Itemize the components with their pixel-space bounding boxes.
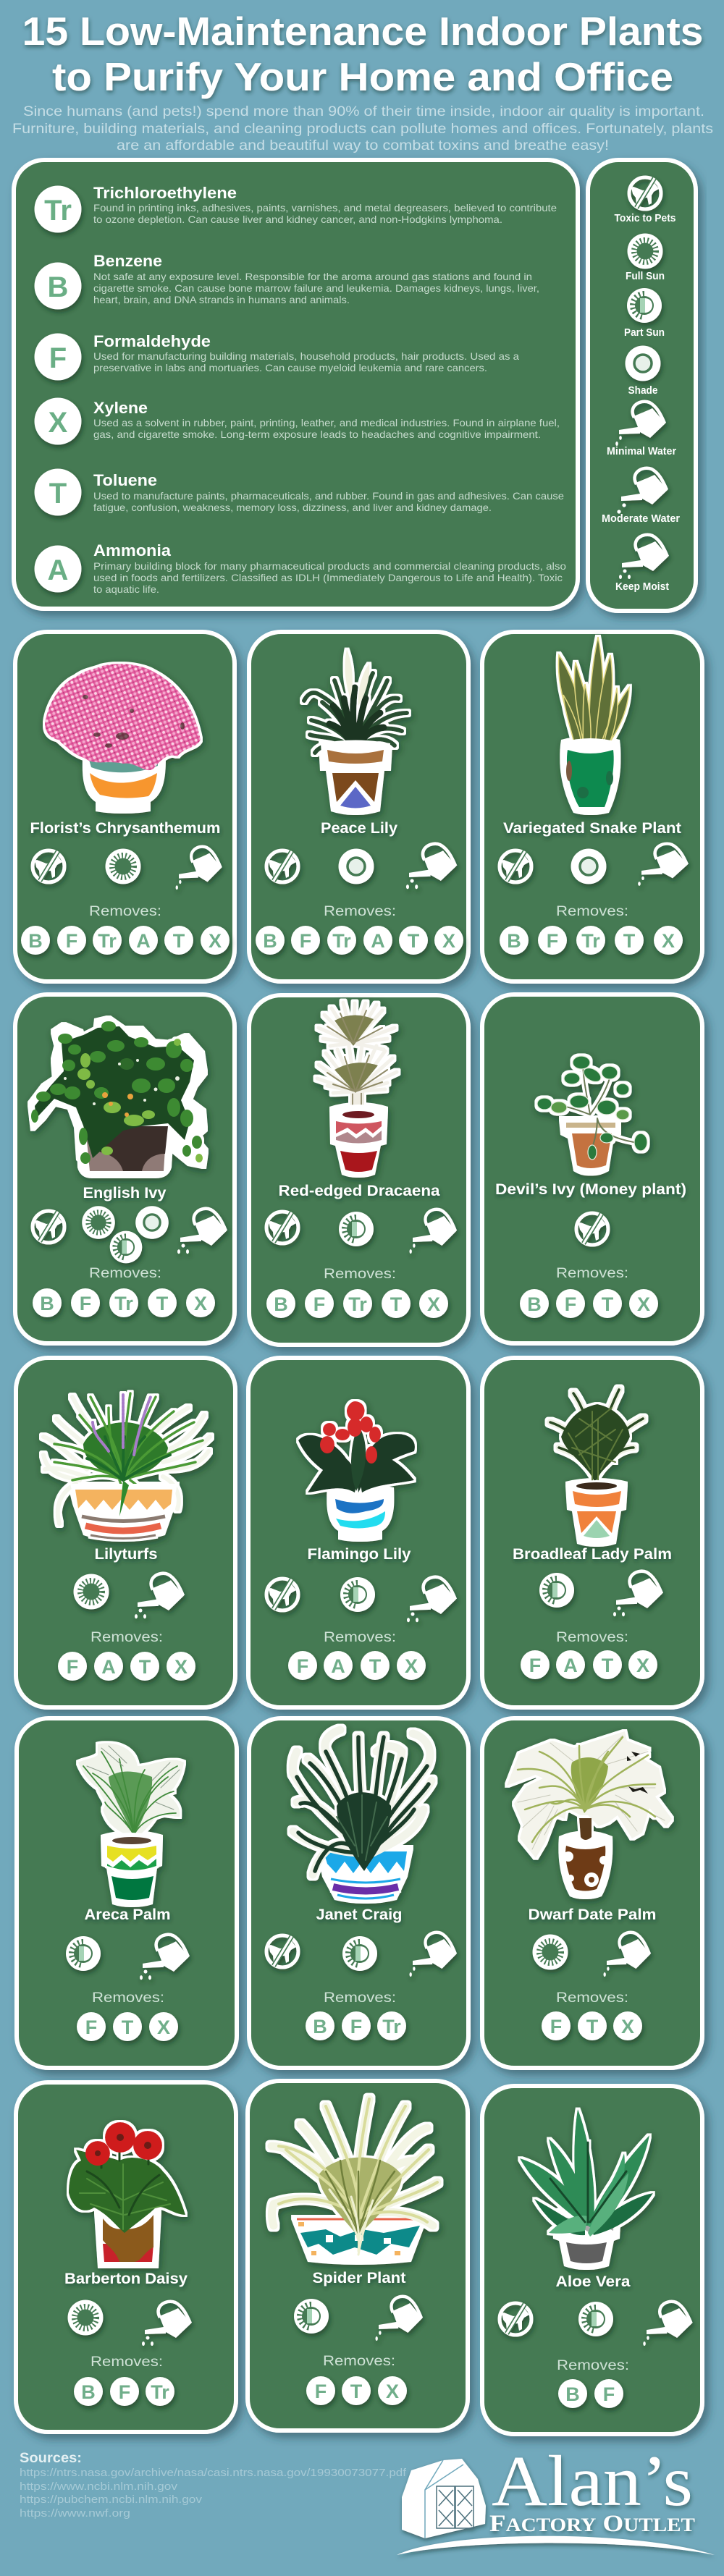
toxin badges: T: [139, 1656, 151, 1678]
toxin badges: Tr: [98, 930, 117, 952]
toxin badges: F: [603, 2383, 615, 2405]
toxin badges: F: [67, 1656, 78, 1678]
removes label: Removes:: [324, 1630, 396, 1645]
title: 15 Low-Maintenance Indoor Plants: [22, 9, 703, 54]
toxin badges: F: [315, 2381, 327, 2402]
plant name: Peace Lily: [321, 820, 397, 837]
toxin badges: F: [300, 930, 311, 952]
toxin badges: X: [194, 1293, 207, 1314]
toxin badges: T: [586, 2016, 599, 2037]
toxin badges: X: [442, 930, 455, 952]
title: [22, 9, 703, 99]
sources: [20, 2451, 407, 2520]
toxin badges: A: [331, 1655, 345, 1677]
chemical: Formaldehyde: Formaldehyde: [93, 332, 211, 350]
panel: Aloe Vera: [482, 2086, 702, 2434]
toxin badges: X: [637, 1293, 650, 1315]
plant: peace lily in brown pot: [304, 649, 407, 813]
removes label: Removes:: [324, 1990, 396, 2006]
toxin badges: X: [636, 1655, 649, 1676]
toxin badges: X: [386, 2381, 399, 2402]
toxin badges: F: [80, 1293, 91, 1314]
toxin badges: T: [602, 1655, 614, 1676]
plant name: Devil’s Ivy (Money plant): [495, 1181, 686, 1198]
care icons: [266, 844, 456, 889]
toxin badges: T: [156, 1293, 169, 1314]
legend: moderate water: [602, 468, 680, 525]
plant: flamingo lily in blue pot: [298, 1401, 415, 1540]
plant name: Spider Plant: [313, 2270, 405, 2286]
care icons: [533, 1933, 650, 1977]
plant: snake plant in green pot: [558, 637, 629, 813]
legend: full sun: [626, 233, 665, 282]
toxin badges: B: [81, 2381, 96, 2403]
toxin badges: [306, 2376, 407, 2405]
toxin badges: B: [263, 930, 277, 952]
plant name: Areca Palm: [84, 1906, 171, 1923]
legend: moderate water: Moderate Water: [602, 513, 680, 525]
plant name: Flamingo Lily: [307, 1546, 411, 1563]
toxin badges: Tr: [348, 1293, 367, 1315]
plant name: Variegated Snake Plant: [503, 820, 681, 837]
removes label: Removes:: [556, 1990, 628, 2006]
chemical: Toluene: Toluene: [93, 471, 157, 489]
toxin badges: B: [313, 2016, 327, 2037]
chemical: Toluene: T: [49, 478, 67, 510]
removes label: Removes:: [323, 2354, 395, 2369]
chemical: Xylene: gas, and cigarette smoke. Long-term exposure leads to headaches and cognitive impairment.: [93, 428, 541, 440]
panel: Lilyturfs: [16, 1358, 235, 1707]
icon: barn: [402, 2459, 486, 2538]
toxin badges: T: [369, 1655, 382, 1677]
care icons: [576, 1213, 608, 1245]
logo: Alan's Factory Outlet: [397, 2441, 715, 2555]
toxin badges: F: [119, 2381, 130, 2403]
toxin badges: [74, 2377, 174, 2406]
removes label: Removes:: [556, 904, 628, 919]
panel: icon legend: [588, 160, 696, 611]
toxin badges: X: [662, 930, 675, 952]
toxin badges: F: [313, 1293, 325, 1315]
chemical: Trichloroethylene: Tr: [44, 195, 72, 227]
legend: minimal water: Minimal Water: [607, 446, 676, 457]
toxin badges: F: [85, 2017, 97, 2038]
chemical: Ammonia: used in foods and fertilizers. Classified as IDLH (Immediately Dangerous to Life and Health). Toxic: [93, 572, 563, 583]
chemical: Xylene: Xylene: [93, 399, 148, 417]
toxin badges: X: [174, 1656, 188, 1678]
chemical: Ammonia: [35, 541, 566, 595]
legend: part sun: [624, 288, 665, 339]
care icons: [500, 844, 688, 886]
toxin badges: Tr: [114, 1293, 133, 1314]
chemical: Xylene: Used as a solvent in rubber, paint, printing, leather, and medical industries. Found in airplane fuel,: [93, 417, 560, 428]
panel: Areca Palm: [17, 1718, 237, 2068]
panel: chemical toxins: [14, 160, 578, 609]
chemical: Toluene: fatigue, confusion, weakness, memory loss, dizziness, and liver and kidney damage.: [93, 502, 492, 513]
panel: Variegated Snake Plant: [482, 632, 702, 981]
chemical: Benzene: Benzene: [93, 252, 162, 270]
removes label: Removes:: [324, 904, 396, 919]
legend: toxic to pets: Toxic to Pets: [614, 213, 676, 224]
panel: Dwarf Date Palm: [482, 1718, 702, 2068]
toxin badges: T: [602, 1293, 614, 1315]
legend: full sun: Full Sun: [626, 271, 665, 282]
toxin badges: T: [623, 930, 636, 952]
removes label: Removes:: [556, 1266, 628, 1281]
panel: Flamingo Lily: [248, 1358, 468, 1707]
legend: keep moist: [615, 535, 669, 593]
toxin badges: X: [621, 2016, 634, 2037]
chemical: Benzene: B: [48, 271, 68, 303]
toxin badges: T: [122, 2017, 134, 2038]
plant: red-edged dracaena in red pot: [317, 1002, 397, 1175]
chemical: Formaldehyde: Used for manufacturing building materials, household products, hair products. Used as a: [93, 350, 519, 362]
toxin badges: A: [563, 1655, 578, 1676]
removes label: Removes:: [90, 1630, 163, 1645]
toxin badges: F: [550, 2016, 562, 2037]
toxin badges: F: [565, 1293, 576, 1315]
chemical: Benzene: cigarette smoke. Can cause bone marrow failure and leukemia. Damages kidneys, lungs, liver,: [93, 282, 539, 294]
toxin badges: B: [274, 1293, 288, 1315]
toxin badges: B: [527, 1293, 542, 1315]
removes label: Removes:: [556, 1630, 628, 1645]
sources: https://ntrs.nasa.gov/archive/nasa/casi.ntrs.nasa.gov/19930073077.pdf: [20, 2467, 407, 2479]
chemical: Benzene: [35, 252, 539, 310]
toxin badges: [542, 2011, 642, 2040]
plant: devil's ivy in terracotta pot: [537, 1056, 647, 1174]
removes label: Removes:: [324, 1267, 396, 1282]
toxin badges: B: [28, 930, 43, 952]
sources: https://www.ncbi.nlm.nih.gov: [20, 2480, 178, 2493]
removes label: Removes:: [557, 2358, 629, 2373]
legend: part sun: Part Sun: [624, 327, 665, 339]
plant name: English Ivy: [83, 1185, 167, 1202]
toxin badges: T: [390, 1293, 403, 1315]
chemical: Ammonia: A: [48, 554, 68, 586]
toxin badges: F: [297, 1655, 308, 1677]
plant name: Dwarf Date Palm: [529, 1906, 656, 1923]
logo: Alan's Factory Outlet: FACTORY OUTLET: [489, 2511, 695, 2537]
sources: https://pubchem.ncbi.nlm.nih.gov: [20, 2493, 203, 2506]
plant name: Florist’s Chrysanthemum: [30, 820, 220, 837]
toxin badges: F: [547, 930, 558, 952]
toxin badges: [288, 1651, 426, 1680]
panel: Barberton Daisy: [16, 2082, 236, 2432]
chemical: Formaldehyde: F: [49, 342, 67, 374]
chemical: Toluene: Used to manufacture paints, pharmaceuticals, and rubber. Found in gas and adhesives. Can cause: [93, 490, 564, 502]
plant name: Red-edged Dracaena: [278, 1183, 440, 1199]
legend: shade: Shade: [628, 385, 657, 397]
plant: lilyturf in patterned pot: [43, 1393, 210, 1539]
plant: english ivy in dark pot: [30, 1018, 206, 1176]
removes label: Removes:: [90, 2355, 163, 2370]
toxin badges: Tr: [151, 2381, 169, 2403]
toxin badges: F: [529, 1655, 541, 1676]
toxin badges: [306, 2011, 406, 2040]
toxin badges: [58, 1652, 195, 1681]
chemical: Benzene: Not safe at any exposure level. Responsible for the aroma around gas stations and found in: [93, 271, 532, 282]
removes label: Removes:: [89, 904, 161, 919]
intro text: are an affordable and beautiful way to combat toxins and breathe easy!: [117, 138, 609, 153]
toxin badges: B: [565, 2383, 580, 2405]
toxin badges: A: [371, 930, 385, 952]
legend: toxic to pets: [614, 177, 676, 224]
toxin badges: A: [136, 930, 151, 952]
sources: https://www.nwf.org: [20, 2507, 130, 2520]
panel: Red-edged Dracaena: [249, 995, 468, 1345]
removes label: Removes:: [92, 1990, 164, 2006]
toxin badges: [500, 926, 683, 955]
care icons: [266, 1933, 456, 1977]
chemical: Trichloroethylene: Found in printing inks, adhesives, paints, varnishes, and metal degreasers, believed to contribute: [93, 202, 557, 214]
toxin badges: B: [40, 1293, 54, 1314]
toxin badges: [21, 926, 230, 955]
care icons: [68, 2300, 191, 2346]
care icons: [266, 1577, 456, 1622]
panel: English Ivy: [15, 994, 235, 1343]
intro text: Since humans (and pets!) spend more than 90% of their time inside, indoor air quality is important.: [23, 104, 704, 119]
plant: spider plant in teal pot: [272, 2099, 437, 2263]
sources: Sources:: [20, 2451, 82, 2466]
plant: areca palm in green pot: [78, 1743, 184, 1905]
chemical: Ammonia: Primary building block for many pharmaceutical products and commercial cleaning products, also: [93, 560, 566, 572]
care icons: [539, 1571, 662, 1616]
panel: Spider Plant: [248, 2081, 468, 2431]
care icons: [66, 1935, 189, 1980]
chemical: Ammonia: Ammonia: [93, 541, 172, 559]
logo: Alan's Factory Outlet: Alan’s: [492, 2441, 693, 2521]
toxin badges: Tr: [382, 2016, 401, 2037]
plant name: Lilyturfs: [94, 1546, 158, 1563]
toxin badges: F: [350, 2016, 362, 2037]
plant name: Barberton Daisy: [64, 2271, 188, 2287]
care icons: [74, 1574, 184, 1618]
intro text: [12, 104, 713, 153]
care icons: [33, 1206, 227, 1263]
toxin badges: B: [507, 930, 521, 952]
toxin badges: Tr: [332, 930, 351, 952]
legend: keep moist: Keep Moist: [615, 581, 669, 593]
chemical: Formaldehyde: preservative in labs and mortuaries. Can cause myeloid leukemia and rare cancers.: [93, 362, 487, 373]
toxin badges: X: [405, 1655, 418, 1677]
removes label: Removes:: [89, 1266, 161, 1281]
toxin badges: X: [427, 1293, 440, 1315]
toxin badges: T: [350, 2381, 363, 2402]
care icons: [500, 2302, 692, 2346]
title: to Purify Your Home and Office: [52, 54, 673, 99]
chemical: Toluene: [35, 469, 564, 515]
plant: chrysanthemum in orange pot: [45, 664, 201, 811]
toxin badges: [266, 1289, 448, 1318]
panel: Florist's Chrysanthemum: [15, 632, 235, 981]
panel: Janet Craig: [249, 1718, 468, 2068]
care icons: [33, 847, 222, 890]
plant: janet craig in patterned blue pot: [292, 1730, 432, 1901]
panel: Devil's Ivy: [482, 994, 702, 1343]
plant: dwarf date palm in brown pot: [507, 1731, 672, 1897]
toxin badges: Tr: [581, 930, 600, 952]
care icons: [266, 1209, 456, 1254]
legend: shade: [626, 346, 660, 397]
toxin badges: [521, 1650, 657, 1679]
chemical: Trichloroethylene: [35, 184, 557, 233]
plant name: Aloe Vera: [556, 2273, 631, 2290]
toxin badges: T: [173, 930, 185, 952]
chemical: Xylene: X: [49, 407, 68, 439]
plant: aloe vera in grey pot: [520, 2109, 653, 2268]
toxin badges: [558, 2379, 623, 2408]
chemical: Benzene: heart, brain, and DNA strands in humans and animals.: [93, 294, 350, 305]
toxin badges: X: [157, 2017, 170, 2038]
chemical: Xylene: [35, 398, 560, 444]
plant: barberton daisy in brown pot: [69, 2122, 185, 2266]
care icons: [294, 2297, 422, 2341]
toxin badges: [77, 2012, 178, 2041]
chemical: Trichloroethylene: to ozone depletion. Can cause liver and kidney cancer, and non-Hodgkins lymphoma.: [93, 214, 502, 225]
toxin badges: [520, 1289, 658, 1318]
chemical: Ammonia: to aquatic life.: [93, 583, 159, 595]
plant name: Broadleaf Lady Palm: [513, 1546, 672, 1563]
plant name: Janet Craig: [316, 1906, 403, 1923]
toxin badges: A: [101, 1656, 116, 1678]
toxin badges: [33, 1288, 215, 1317]
toxin badges: F: [66, 930, 77, 952]
chemical: Trichloroethylene: Trichloroethylene: [93, 184, 237, 202]
panel: Peace Lily: [249, 632, 468, 981]
intro text: Furniture, building materials, and cleaning products can pollute homes and offices. Fortunately, plants: [12, 121, 713, 137]
panel: Broadleaf Lady Palm: [482, 1358, 702, 1707]
chemical: Formaldehyde: [35, 332, 519, 381]
toxin badges: [256, 926, 463, 955]
legend: minimal water: [607, 402, 676, 457]
toxin badges: X: [209, 930, 222, 952]
plant: broadleaf lady palm in orange pot: [550, 1390, 643, 1545]
toxin badges: T: [408, 930, 420, 952]
